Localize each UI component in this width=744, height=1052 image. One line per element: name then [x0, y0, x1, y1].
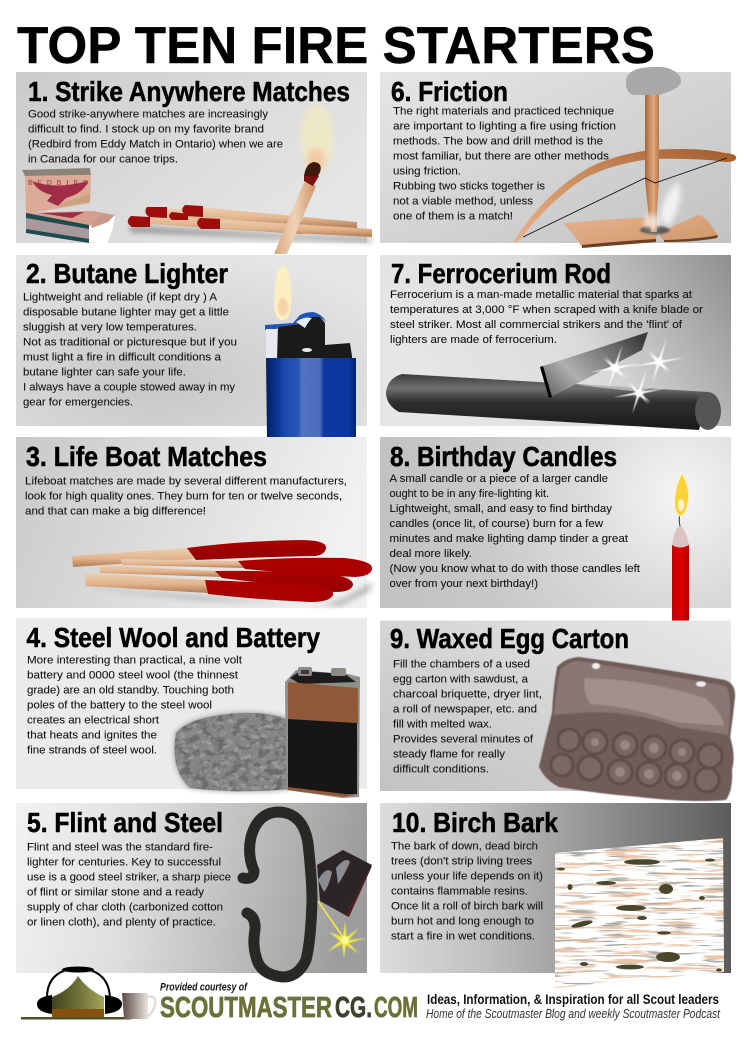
- text: 6: The right materials and practiced technique: [393, 106, 614, 118]
- panel: 3 life boat matches: [16, 437, 367, 608]
- text: 5: or linen cloth), and plenty of practice.: [27, 917, 216, 929]
- text: 8: over from your next birthday!): [390, 578, 538, 590]
- headphones: [37, 966, 122, 1014]
- text: 2: Lightweight and reliable (if kept dry ) A: [23, 292, 217, 304]
- panel: 5 flint and steel: [16, 803, 372, 973]
- match 3: [99, 565, 222, 577]
- panel: 8 birthday candles: [380, 437, 731, 608]
- text: 9: charcoal briquette, dryer lint,: [393, 688, 542, 700]
- text: 3: look for high quality ones. They burn for ten or twelve seconds,: [25, 490, 342, 502]
- text: 7: lighters are made of ferrocerium.: [390, 334, 557, 346]
- text: 6: not a viable method, unless: [393, 196, 533, 208]
- icon: bow and drill: [513, 67, 736, 248]
- text: 4: creates an electrical short: [27, 714, 160, 726]
- text: 10: contains flammable resins.: [391, 885, 528, 897]
- text: 2: I always have a couple stowed away in my: [23, 382, 235, 394]
- smoke: [660, 182, 680, 228]
- text: 4: that heats and ignites the: [27, 729, 157, 741]
- stone: [626, 67, 681, 95]
- match 2: [121, 559, 245, 568]
- text: 10: trees (don't strip living trees: [391, 855, 532, 867]
- heading: 7: 7. Ferrocerium Rod: [391, 258, 611, 289]
- text: 9: fill with melted wax.: [393, 718, 492, 730]
- footer: site name: CG.: [335, 992, 372, 1024]
- icon: ferro rod and striker: [386, 332, 721, 430]
- icon: birthday candle: [672, 473, 689, 620]
- logo: podcast hat and headphones: [21, 966, 155, 1020]
- icon: steel striker: [243, 812, 312, 977]
- footer: site name: COM: [374, 992, 418, 1024]
- text: 4: grade) are an old standby. Touching both: [27, 684, 234, 696]
- coffee mug: [122, 993, 155, 1019]
- panel: 1 strike anywhere matches: [16, 72, 372, 254]
- text: 6: [393, 106, 616, 223]
- icon: nine volt battery: [285, 667, 360, 798]
- text: 6: methods. The bow and drill method is the: [393, 136, 603, 148]
- text: 6: most familiar, but there are other methods: [393, 151, 609, 163]
- text: 8: (Now you know what to do with those candles left: [390, 563, 641, 575]
- text: 1: [28, 108, 283, 165]
- lower box: [26, 211, 115, 226]
- text: 9: Fill the chambers of a used: [393, 658, 530, 670]
- campaign hat: [52, 976, 104, 1017]
- text: 9: Provides several minutes of: [393, 733, 534, 745]
- icon: lighter: [265, 265, 356, 437]
- text: 1: Good strike-anywhere matches are increasingly: [28, 108, 268, 120]
- text: 9: difficult conditions.: [393, 763, 489, 775]
- text: 9: [393, 658, 542, 775]
- icon: spark: [318, 901, 367, 958]
- heading: 8: 8. Birthday Candles: [390, 441, 617, 472]
- text: 8: A small candle or a piece of a larger candle: [390, 473, 608, 485]
- footer: site name: SCOUTMASTER: [160, 992, 332, 1024]
- text: 2: Not as traditional or picturesque but if you: [23, 337, 237, 349]
- fireboard: [563, 215, 718, 247]
- text: 7: [390, 289, 703, 346]
- icon: redbird matchboxes: REDBIRD: [28, 179, 88, 187]
- heading: 4: 4. Steel Wool and Battery: [26, 622, 320, 653]
- text: 9: steady flame for really: [393, 748, 505, 760]
- icon: burning match: [274, 105, 333, 254]
- upper box: [22, 168, 91, 176]
- text: 4: [27, 654, 243, 756]
- text: 2: disposable butane lighter may get a little: [23, 307, 229, 319]
- text: 10: burn hot and long enough to: [391, 915, 534, 927]
- panel: 2 butane lighter: [16, 255, 367, 426]
- text: 6: using friction.: [393, 166, 461, 178]
- match 1: [72, 548, 196, 567]
- text: 2: [23, 292, 237, 409]
- text: 1: in Canada for our canoe trips.: [28, 153, 178, 165]
- icon: redbird matchboxes: [22, 168, 115, 245]
- drill: [645, 95, 659, 232]
- heading: 9: 9. Waxed Egg Carton: [390, 623, 629, 654]
- text: 2: gear for emergencies.: [23, 397, 133, 409]
- heading: 6: 6. Friction: [391, 76, 508, 107]
- text: 1: (Redbird from Eddy Match in Ontario) when we are: [28, 138, 283, 150]
- text: 10: start a fire in wet conditions.: [391, 930, 535, 942]
- text: 7: temperatures at 3,000 °F when scraped with a knife blade or: [390, 304, 703, 316]
- text: 9: egg carton with sawdust, a: [393, 673, 529, 685]
- text: 4: poles of the battery to the steel wool: [27, 699, 212, 711]
- text: 8: minutes and make lighting damp tinder a great: [390, 533, 629, 545]
- icon: life boat matches: [72, 540, 372, 606]
- text: 3: and that can make a big difference!: [25, 505, 206, 517]
- text: 8: [390, 473, 641, 590]
- text: 3: [25, 475, 347, 517]
- panel: 10 birch bark: [380, 803, 731, 988]
- text: 6: Rubbing two sticks together is: [393, 181, 545, 193]
- icon: pile of matches: [128, 205, 372, 242]
- icon: egg carton: [539, 657, 735, 801]
- text: 5: lighter for centuries. Key to successful: [27, 857, 221, 869]
- text: 3: Lifeboat matches are made by several different manufacturers,: [25, 475, 347, 487]
- panel: 6 friction: [380, 67, 736, 248]
- text: 2: sluggish at very low temperatures.: [23, 322, 197, 334]
- text: 1: difficult to find. I stock up on my favorite brand: [28, 123, 264, 135]
- icon: steel wool: [170, 710, 292, 796]
- text: 10: [391, 840, 543, 942]
- text: 10: unless your life depends on it): [391, 870, 543, 882]
- panel: 4 steel wool and battery: [16, 618, 367, 789]
- heading: 10: 10. Birch Bark: [392, 807, 558, 838]
- icon: flint rock: [317, 850, 372, 917]
- heading: 3: 3. Life Boat Matches: [26, 441, 267, 472]
- bow: [513, 149, 736, 242]
- text: 7: steel striker. Most all commercial strikers and the 'flint' of: [390, 319, 683, 331]
- text: 5: supply of char cloth (carbonized cotton: [27, 902, 223, 914]
- text: 8: deal more likely.: [390, 548, 472, 560]
- text: 8: Lightweight, small, and easy to find birthday: [390, 503, 612, 515]
- heading: 5: 5. Flint and Steel: [27, 807, 223, 838]
- heading: 1: 1. Strike Anywhere Matches: [28, 76, 350, 107]
- text: 5: use is a good steel striker, a sharp piece: [27, 872, 231, 884]
- text: 4: battery and 0000 steel wool (the thinnest: [27, 669, 239, 681]
- text: 5: of flint or similar stone and a ready: [27, 887, 204, 899]
- text: 10: Once lit a roll of birch bark will: [391, 900, 543, 912]
- panel: 9 waxed egg carton: [380, 620, 731, 791]
- title: TOP TEN FIRE STARTERS: [17, 17, 655, 75]
- text: 7: Ferrocerium is a man-made metallic material that sparks at: [390, 289, 693, 301]
- footer: courtesy line: Provided courtesy of: [160, 982, 248, 994]
- text: 8: candles (once lit, of course) burn for a few: [390, 518, 604, 530]
- text: 4: fine strands of steel wool.: [27, 744, 157, 756]
- text: 8: ought to be in any fire-lighting kit.: [390, 488, 549, 500]
- text: 2: must light a fire in difficult conditions a: [23, 352, 222, 364]
- text: 6: one of them is a match!: [393, 211, 513, 223]
- match 4: [84, 573, 208, 593]
- text: 4: More interesting than practical, a nine volt: [27, 654, 243, 666]
- text: 5: Flint and steel was the standard fire-: [27, 842, 213, 854]
- panel: 7 ferrocerium rod: [380, 255, 731, 430]
- string: [523, 158, 727, 237]
- text: 2: butane lighter can safe your life.: [23, 367, 186, 379]
- text: 10: The bark of down, dead birch: [391, 840, 538, 852]
- text: 6: are important to lighting a fire using friction: [393, 121, 616, 133]
- heading: 2: 2. Butane Lighter: [26, 258, 228, 289]
- text: 9: a roll of newspaper, etc. and: [393, 703, 537, 715]
- icon: birch bark sheet: [555, 838, 725, 988]
- text: 5: [27, 842, 231, 929]
